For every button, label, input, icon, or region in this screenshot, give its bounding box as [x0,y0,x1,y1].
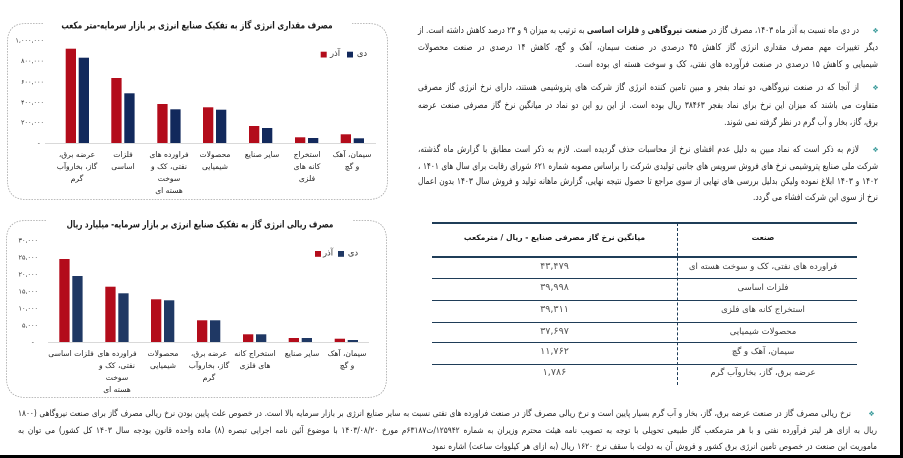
y axis labels: - [32,338,35,346]
text block: paragraph 1 [418,24,879,70]
y axis labels [18,236,38,346]
category labels [48,348,366,394]
panel: rial gas consumption chart [6,218,387,398]
category labels: و گچ [340,361,355,370]
text block: bottom note [18,408,877,452]
y axis labels [15,36,44,148]
y axis labels: ۶۰۰,۰۰۰ [21,78,44,86]
legend [315,246,358,258]
table row: فراورده های نفتی، کک و سوخت هسته ای [689,262,837,272]
category labels: فلزات [113,150,133,159]
table row: محصولات شیمیایی [730,327,796,337]
table row: عرضه برق، گاز، بخاروآب گرم [710,368,816,378]
category labels: سایر صنایع [245,150,279,159]
text block: paragraph 3: لازم به ذکر است که نماد مبین به دلیل عدم افشای نرخ از محاسبات حذف گردیده است. لازم به ذکر است مطابق با گزارش ماه گذشته، [418,145,859,155]
category labels: فراورده های [149,150,189,159]
table row [543,367,816,378]
y axis labels: ۵,۰۰۰ [22,322,38,330]
category labels: های فلزی [240,361,270,370]
text block: paragraph 1: شیمیایی و کاهش ۱۵ درصدی در صنعت فرآورده های نفتی، کک و سوخت هسته ای بوده است. [575,60,878,70]
y axis labels: ۲۰,۰۰۰ [18,270,38,278]
category labels: محصولات [148,349,178,358]
bars [48,259,369,343]
text block: bottom note: ریال به ازای هر لیتر فرآورده نفتی و با هر مترمکعب گاز طبیعی تحویلی با توجه به تصویب نامه هیئت محترم وزیران به شماره ۱۲۵۹۴۲/ت۶۳۱۸۷م مورخ ۱۴۰۳/۰۸/۲۰ با موضوع آئین نامه اجرایی تبصره (۸) ماده واحده قانون بودجه سال ۱۴۰۳ کل کشور) می توان به [18,426,877,436]
black right edge [900,0,903,458]
category labels: سوخت [158,174,180,183]
category labels: سایر صنایع [285,349,319,358]
table row: سیمان، آهک و گچ [732,347,794,357]
bullet icon: ❖ [872,84,879,92]
category labels: نفتی، کک و [150,162,187,171]
bullet icon: ❖ [872,27,879,35]
text block: paragraph 3: نرخ از سوی این شرکت افشاء می گردد. [753,193,878,203]
category labels: عرضه برق، [191,349,227,358]
category labels: فلزی [299,174,316,183]
chart title: مصرف ریالی انرژی گاز به تفکیک صنایع انرژی بر بازار سرمایه- میلیارد ریال [67,218,333,231]
bars [45,49,376,144]
category labels: سوخت [106,373,128,382]
legend: دی [357,48,367,58]
y axis labels: ۴۰۰,۰۰۰ [21,98,44,106]
text block: paragraph 2 [418,81,879,128]
panel: volumetric gas consumption chart [7,20,388,200]
table row: ۳۹,۹۹۸ [540,282,569,293]
category labels: محصولات [200,150,230,159]
category labels: عرضه برق، [59,150,95,159]
text block: paragraph 3: شرکت ملی صنایع پتروشیمی نرخ های فروش سرویس های جانبی تولیدی شرکت را براساس مصوبه شماره ۶۲۱ شورای رقابت برای سال های ۱۴۰۱ ، [418,162,878,172]
category labels: گرم [203,373,216,382]
text block: paragraph 2: از آنجا که در صنعت نیروگاهی، دو نماد بفجر و مبین تامین کننده انرژی گاز شرکت های پتروشیمی هستند، دارای نرخ انرژی گاز مصرفی [418,83,859,93]
category labels: شیمیایی [202,162,228,171]
table header: میانگین نرخ گاز مصرفی صنایع - ریال / مترمکعب [464,233,645,242]
legend: آذر [322,246,334,258]
category labels: کانه های [294,162,321,171]
text block: bottom note: نرخ ریالی مصرف گاز در صنعت عرضه برق، گاز، بخار و آب گرم بسیار پایین است و نرخ ریالی مصرف گاز در صنعت فراورده های نفتی نسبت به سایر صنایع انرژی بر بازار سرمایه بالا است. در خصوص علت پایین بودن نرخ ریالی مصرف گاز برای صنعت نیروگاهی (۱۸۰۰ [18,409,851,419]
bullet icon: ❖ [868,410,875,418]
y axis labels: ۱۰,۰۰۰ [18,304,38,312]
y axis labels: ۲۵,۰۰۰ [18,254,38,262]
table row [540,304,805,315]
bullet icon: ❖ [872,146,879,154]
category labels: گاز، بخاروآب [189,360,230,370]
category labels: استخراج [294,150,320,159]
table header [464,233,774,242]
category labels: استخراج کانه [234,349,276,358]
y axis labels: ۱۵,۰۰۰ [18,288,38,296]
category labels: نفتی، کک و [98,361,135,370]
y axis labels: ۱,۰۰۰,۰۰۰ [15,36,44,44]
table row: ۴۳,۴۷۹ [540,261,569,272]
y axis labels: ۲۰۰,۰۰۰ [21,118,44,126]
category labels: فراورده های [97,349,137,358]
legend: آذر [329,47,341,58]
table row: ۱۱,۷۶۲ [540,346,569,357]
black bottom edge [0,455,903,458]
text block: paragraph 3 [418,144,879,203]
category labels: اساسی [111,162,135,171]
text block: paragraph 3: ۱۴۰۲ و ۱۴۰۳ ابلاغ نموده ولیکن بدلیل بررسی های نهایی از سوی مراجع تا حصول نتیجه نهایی، گزارش ماهانه تولید و فروش سال ۱۴۰۳ بدون اعمال [418,177,878,187]
table row: ۱,۷۸۶ [543,367,566,378]
y axis labels: - [38,140,41,148]
category labels: گاز، بخاروآب [57,161,98,171]
category labels: گرم [71,174,84,183]
category labels: سیمان، آهک [328,348,366,358]
chart title: مصرف مقداری انرژی گاز به تفکیک صنایع انرژی بر بازار سرمایه-متر مکعب [61,20,333,32]
panel frame [8,24,388,200]
text block: paragraph 2: متفاوت می باشند که میزان این نرخ برای نماد بفجر ۳۸۴۶۳ ریال بوده است. از این رو این دو نماد در میانگین نرخ گاز مصرفی صنعت عرضه [418,101,878,111]
table row [540,261,837,272]
table row [540,346,794,357]
table row [540,282,788,293]
legend: دی [348,248,358,258]
category labels: و گچ [345,162,360,171]
text block: paragraph 2: برق، گاز، بخار و آب گرم در نظر گرفته نمی شوند. [724,118,878,128]
table row: ۳۷,۶۹۷ [540,326,569,337]
text block: paragraph 1: دیگر تغییرات مهم مصرف مقداری انرژی گاز کاهش ۴۵ درصدی در صنعت سیمان، آهک و گچ، کاهش ۱۴ درصدی در صنعت محصولات [418,43,878,53]
category labels: سیمان، آهک [333,149,371,159]
category labels: شیمیایی [150,361,176,370]
category labels: هسته ای [103,385,131,394]
table row: استخراج کانه های فلزی [721,305,805,315]
legend [321,47,367,58]
text block: paragraph 1: در دی ماه نسبت به آذر ماه ۱۴۰۳، مصرف گاز در صنعت نیروگاهی و فلزات اساسی به ترتیب به میزان ۹ و ۲۳ درصد کاهش داشته است. از [418,26,859,36]
y axis labels: ۳۰,۰۰۰ [18,236,38,244]
table row: فلزات اساسی [738,283,788,293]
table row [540,326,796,337]
category labels: هسته ای [155,186,183,195]
table row: ۳۹,۳۱۱ [540,304,569,315]
y axis labels: ۸۰۰,۰۰۰ [21,57,44,65]
text block: bottom note: ماموریت این صنعت در خصوص تامین انرژی برق کشور و فروش آن به دولت با سقف نرخ ۱۶۲۰ ریال (به ازای هر کیلووات ساعت) اشاره نمود [432,442,877,452]
table header: صنعت [752,233,774,242]
category labels: فلزات اساسی [48,349,94,358]
category labels [57,149,371,195]
panel frame [6,220,386,398]
